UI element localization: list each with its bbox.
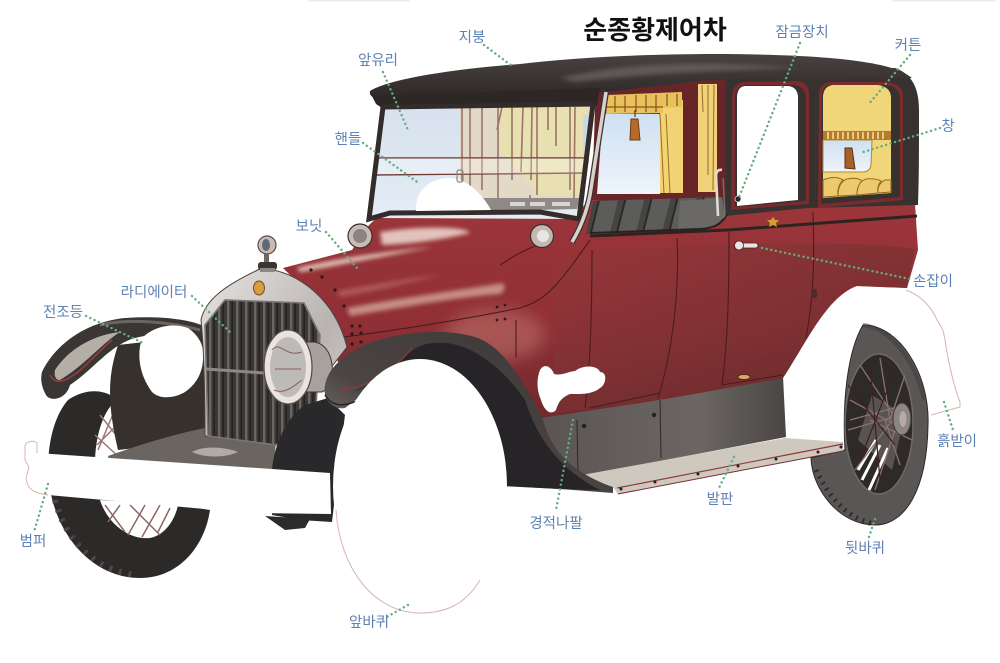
running board [582,438,843,494]
view through the glass [460,105,590,211]
label: curtain [868,37,921,105]
label: mudguard: 흙받이 [937,433,977,450]
label: lock: 잠금장치 [775,24,829,41]
rear window [818,82,903,208]
front fender and arch [325,332,613,493]
rear wheel [811,325,928,525]
roof [370,54,912,108]
label: rear wheel: 뒷바퀴 [845,540,885,557]
label: front wheel [349,605,408,631]
rear yellow panel [698,84,717,192]
label: running board: 발판 [707,491,733,508]
apron [108,428,276,480]
side skirt [538,376,786,476]
mascot [258,236,277,272]
label: roof [459,29,512,66]
door hardware [716,170,817,380]
label: roof: 지붕 [459,29,485,46]
radiator badge [254,281,264,295]
label: mudguard [937,402,977,450]
rear fender (white) [906,290,960,415]
front side window [597,84,726,202]
bumper (white) [25,441,331,514]
label: lock [738,24,829,200]
label: radiator [121,284,231,333]
label: windshield: 앞유리 [358,52,398,69]
label: horn: 경적나팔 [529,515,583,532]
label: door handle: 손잡이 [913,273,953,290]
headlamp blank [139,325,203,397]
under-apron black panel [272,398,345,522]
chrome pillar [572,92,606,242]
front wheel (white) [333,359,507,613]
label: headlamp [43,304,143,343]
label: horn [529,420,583,532]
label: curtain: 커튼 [895,37,921,54]
label: headlamp: 전조등 [43,304,83,321]
label: bonnet [296,218,358,269]
left front wheel [48,391,210,578]
rear tassel [845,148,855,169]
label: steering wheel: 핸들 [335,131,361,148]
windshield [369,92,606,242]
seat cushions [823,178,891,197]
label: window [860,118,955,153]
door seams and belt lines [336,212,814,408]
tassel [630,110,640,140]
cowl lamps [348,224,554,248]
label: rear wheel [845,519,885,557]
label: bonnet: 보닛 [296,218,322,235]
label: front wheel: 앞바퀴 [349,614,389,631]
curtain valance [606,92,682,114]
label: running board [707,457,734,508]
main red body [283,198,918,418]
label: steering wheel [335,131,420,184]
grille [205,300,320,445]
label: window: 창 [941,118,955,135]
label: door handle [762,248,953,290]
label: bumper [20,484,48,550]
steering wheel blank [416,178,491,211]
seat [586,197,727,234]
title: 순종황제어차 [583,15,727,45]
label: radiator: 라디에이터 [121,284,187,301]
door window with red frame [731,81,809,210]
horn blank [538,366,605,412]
label: windshield [358,52,408,130]
cabin dark frame [592,70,725,205]
hood highlights [297,228,545,361]
headlight [264,330,332,404]
left fender [41,317,205,450]
radiator [201,236,347,445]
label: bumper: 범퍼 [20,533,46,550]
